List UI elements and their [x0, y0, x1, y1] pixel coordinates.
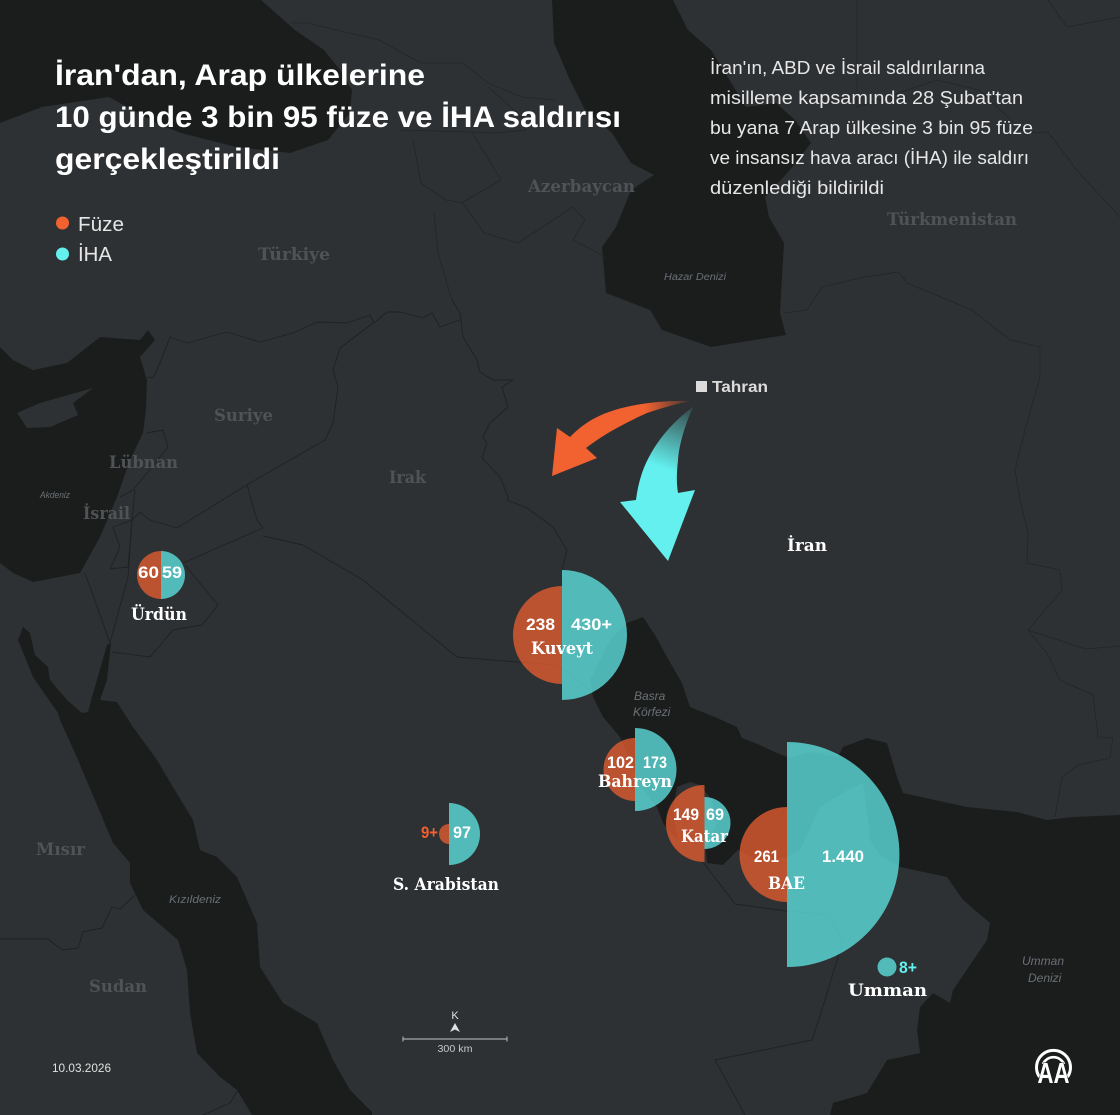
logo: Anadolu Agency — [1036, 1050, 1070, 1090]
value: 8+ — [899, 958, 917, 977]
value: 1.440 — [822, 847, 864, 866]
label: Türkiye: Türkiye — [258, 245, 330, 265]
half circle: missiles — [137, 551, 161, 599]
label: Türkmenistan: Türkmenistan — [887, 210, 1017, 230]
label: Basra Körfezi: Basra — [634, 689, 666, 703]
label: Akdeniz: Akdeniz — [39, 490, 70, 500]
half circle: drones — [449, 803, 480, 865]
value: 102 — [607, 753, 634, 772]
value: 149 — [673, 805, 699, 824]
label: Azerbaycan: Azerbaycan — [527, 177, 635, 197]
legend item: Füze: Füze — [78, 214, 124, 236]
title: 10 günde 3 bin 95 füze ve İHA saldırısı — [55, 101, 621, 134]
half circle: drones — [635, 728, 676, 811]
label: İsrail: İsrail — [83, 503, 130, 524]
value: 173 — [643, 753, 667, 772]
half circle: missiles — [666, 785, 704, 862]
Tahran marker: Tahran — [712, 379, 768, 396]
logo: Anadolu Agency: AA — [1038, 1058, 1070, 1090]
Mediterranean Sea — [0, 330, 155, 582]
Kuveyt: 238 missiles / 430+ drones — [513, 570, 627, 700]
north arrow and scale bar — [403, 1010, 507, 1055]
name: Ürdün — [131, 604, 187, 625]
description text: ve insansız hava aracı (İHA) ile saldırı — [710, 148, 1029, 168]
name: S. Arabistan — [393, 875, 499, 895]
label: Lübnan: Lübnan — [109, 453, 178, 473]
label: Basra Körfezi: Körfezi — [633, 705, 671, 719]
description text: misilleme kapsamında 28 Şubat'tan — [710, 88, 1023, 108]
legend item: İHA: İHA — [78, 243, 113, 266]
map: Cyprus — [17, 388, 93, 428]
map: northern and eastern borders — [290, 0, 1120, 817]
İran label: İran — [787, 535, 827, 556]
Katar: 149 missiles / 69 drones — [666, 785, 731, 862]
name: BAE — [768, 874, 805, 894]
label: Hazar Denizi: Hazar Denizi — [664, 272, 727, 283]
title: gerçekleştirildi — [55, 143, 280, 176]
circle: drones — [878, 958, 896, 976]
value: 9+ — [421, 823, 438, 842]
map: country borders — [0, 300, 843, 1115]
value: 238 — [526, 615, 555, 634]
Bahreyn: 102 missiles / 173 drones — [598, 728, 676, 811]
description text: İran'ın, ABD ve İsrail saldırılarına — [710, 58, 986, 78]
S. Arabistan: 9+ missiles / 97 drones — [393, 803, 499, 895]
north arrow and scale bar: 300 km — [438, 1044, 472, 1055]
name: Umman — [848, 981, 927, 1001]
BAE: 261 missiles / 1.440 drones — [740, 742, 899, 967]
date: 10.03.2026 — [52, 1063, 111, 1075]
map: sea labels — [39, 272, 1064, 985]
Ürdün: 60 missiles / 59 drones — [131, 551, 187, 625]
half circle: missiles — [513, 586, 562, 684]
description text: düzenlediği bildirildi — [710, 178, 884, 198]
label: Suriye: Suriye — [214, 406, 273, 426]
label: Irak: Irak — [389, 468, 427, 488]
half circle: drones — [704, 797, 731, 849]
Black Sea — [0, 0, 352, 153]
description text — [710, 58, 1033, 198]
value: 69 — [706, 805, 724, 824]
Umman: 8+ drones — [848, 958, 927, 1001]
value: 60 — [138, 563, 159, 582]
label: Umman Denizi: Denizi — [1028, 971, 1062, 985]
half circle: drones — [787, 742, 899, 967]
name: Kuveyt — [531, 639, 593, 659]
north arrow and scale bar: K — [451, 1010, 459, 1022]
Persian Gulf and Arabian Sea — [590, 617, 1120, 1115]
name: Katar — [681, 827, 729, 847]
label: Kızıldeniz: Kızıldeniz — [169, 894, 222, 906]
Red Sea and gulfs — [18, 627, 372, 1115]
half circle: drones — [161, 551, 185, 599]
half circle: missiles — [740, 807, 787, 902]
label: Sudan: Sudan — [89, 977, 147, 997]
title: İran'dan, Arap ülkelerine — [55, 59, 425, 92]
value: 97 — [453, 823, 471, 842]
value: 261 — [754, 847, 779, 866]
half circle: missiles — [439, 824, 449, 844]
map: country labels — [36, 177, 1017, 997]
arrow: drones from Tehran (cyan) — [620, 407, 695, 561]
half circle: missiles — [604, 738, 635, 801]
description text: bu yana 7 Arap ülkesine 3 bin 95 füze — [710, 118, 1033, 138]
legend — [56, 214, 124, 266]
title — [55, 59, 621, 176]
half circle: drones — [562, 570, 627, 700]
arrow: missiles from Tehran (orange) — [552, 401, 690, 476]
value: 430+ — [571, 615, 612, 634]
Caspian Sea — [552, 0, 811, 347]
label: Umman Denizi: Umman — [1022, 954, 1064, 968]
value: 59 — [162, 563, 182, 582]
label: Mısır: Mısır — [36, 840, 86, 860]
name: Bahreyn — [598, 772, 672, 792]
